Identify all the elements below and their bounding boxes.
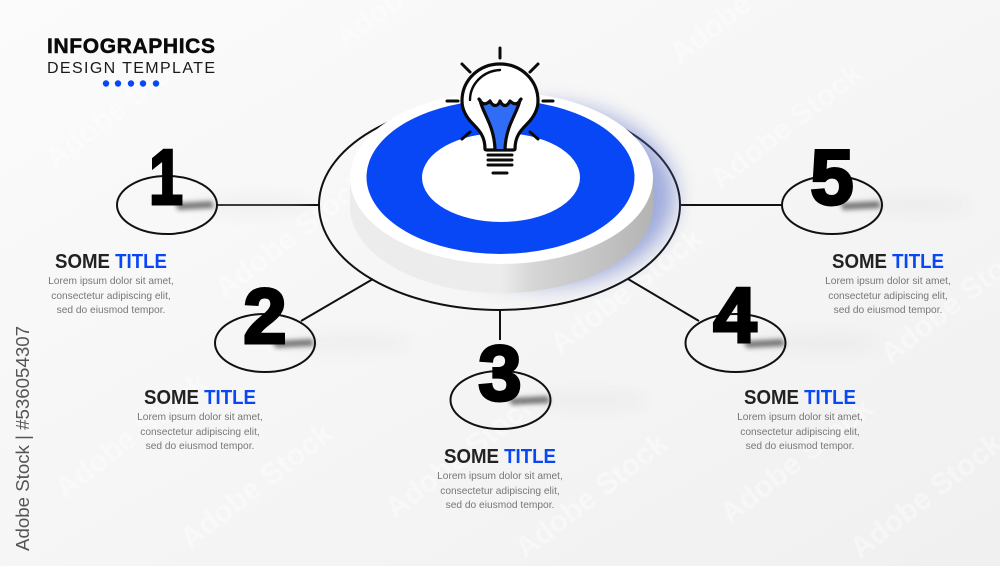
faint shadow 1 [190,195,310,215]
body 4: Lorem ipsum dolor sit amet, [737,412,863,423]
inner white [422,133,580,222]
body 4: consectetur adipiscing elit, [740,427,860,438]
watermarks: Adobe Stock [509,426,674,566]
watermarks: Adobe Stock [49,366,214,506]
header title: INFOGRAPHICS [47,35,215,58]
body 2: Lorem ipsum dolor sit amet, [137,412,263,423]
body 5: sed do eiusmod tempor. [834,305,942,316]
header title: DESIGN TEMPLATE [47,60,215,77]
central platform [319,92,680,310]
title 4: SOME TITLE [744,387,856,409]
watermarks: Adobe Stock [209,166,374,306]
item 3 [437,329,645,511]
disc top [350,92,653,264]
watermarks: Adobe Stock [39,36,204,176]
body 3: consectetur adipiscing elit, [440,486,560,497]
watermarks: Adobe Stock [704,56,869,196]
disc side [350,178,653,293]
item 5 [782,133,970,316]
body 5: consectetur adipiscing elit, [828,291,948,302]
watermarks: Adobe Stock [544,221,709,361]
body 5: Lorem ipsum dolor sit amet, [825,276,951,287]
body 3: sed do eiusmod tempor. [446,500,554,511]
number 3: 3 [478,329,522,417]
body 2: sed do eiusmod tempor. [146,441,254,452]
header dots [103,80,159,87]
icon: light bulb [447,48,553,173]
watermarks: Adobe Stock [714,391,879,531]
platform blue glow [415,105,675,285]
body 1: consectetur adipiscing elit, [51,291,171,302]
number 5: 5 [810,133,854,221]
number shadow [175,201,214,210]
item 2 [137,272,410,452]
body 1: sed do eiusmod tempor. [57,305,165,316]
stock id side label: Adobe Stock | #536054307 [12,326,33,551]
body 2: consectetur adipiscing elit, [140,427,260,438]
title 5: SOME TITLE [832,251,944,273]
item 1 [48,133,310,316]
platform outer ring [319,100,680,310]
header title [47,35,215,87]
title 1: SOME TITLE [55,251,167,273]
body 1: Lorem ipsum dolor sit amet, [48,276,174,287]
body 3: Lorem ipsum dolor sit amet, [437,471,563,482]
body 4: sed do eiusmod tempor. [746,441,854,452]
number 4: 4 [713,271,757,359]
item 4 [686,271,880,452]
connector lines [217,205,782,340]
number 1: 1 [149,133,183,221]
number 2: 2 [243,272,287,360]
watermarks: Adobe Stock [174,416,339,556]
watermarks: Adobe Stock [379,386,544,526]
blue ring [366,100,634,254]
title 3: SOME TITLE [444,446,556,468]
title 2: SOME TITLE [144,387,256,409]
